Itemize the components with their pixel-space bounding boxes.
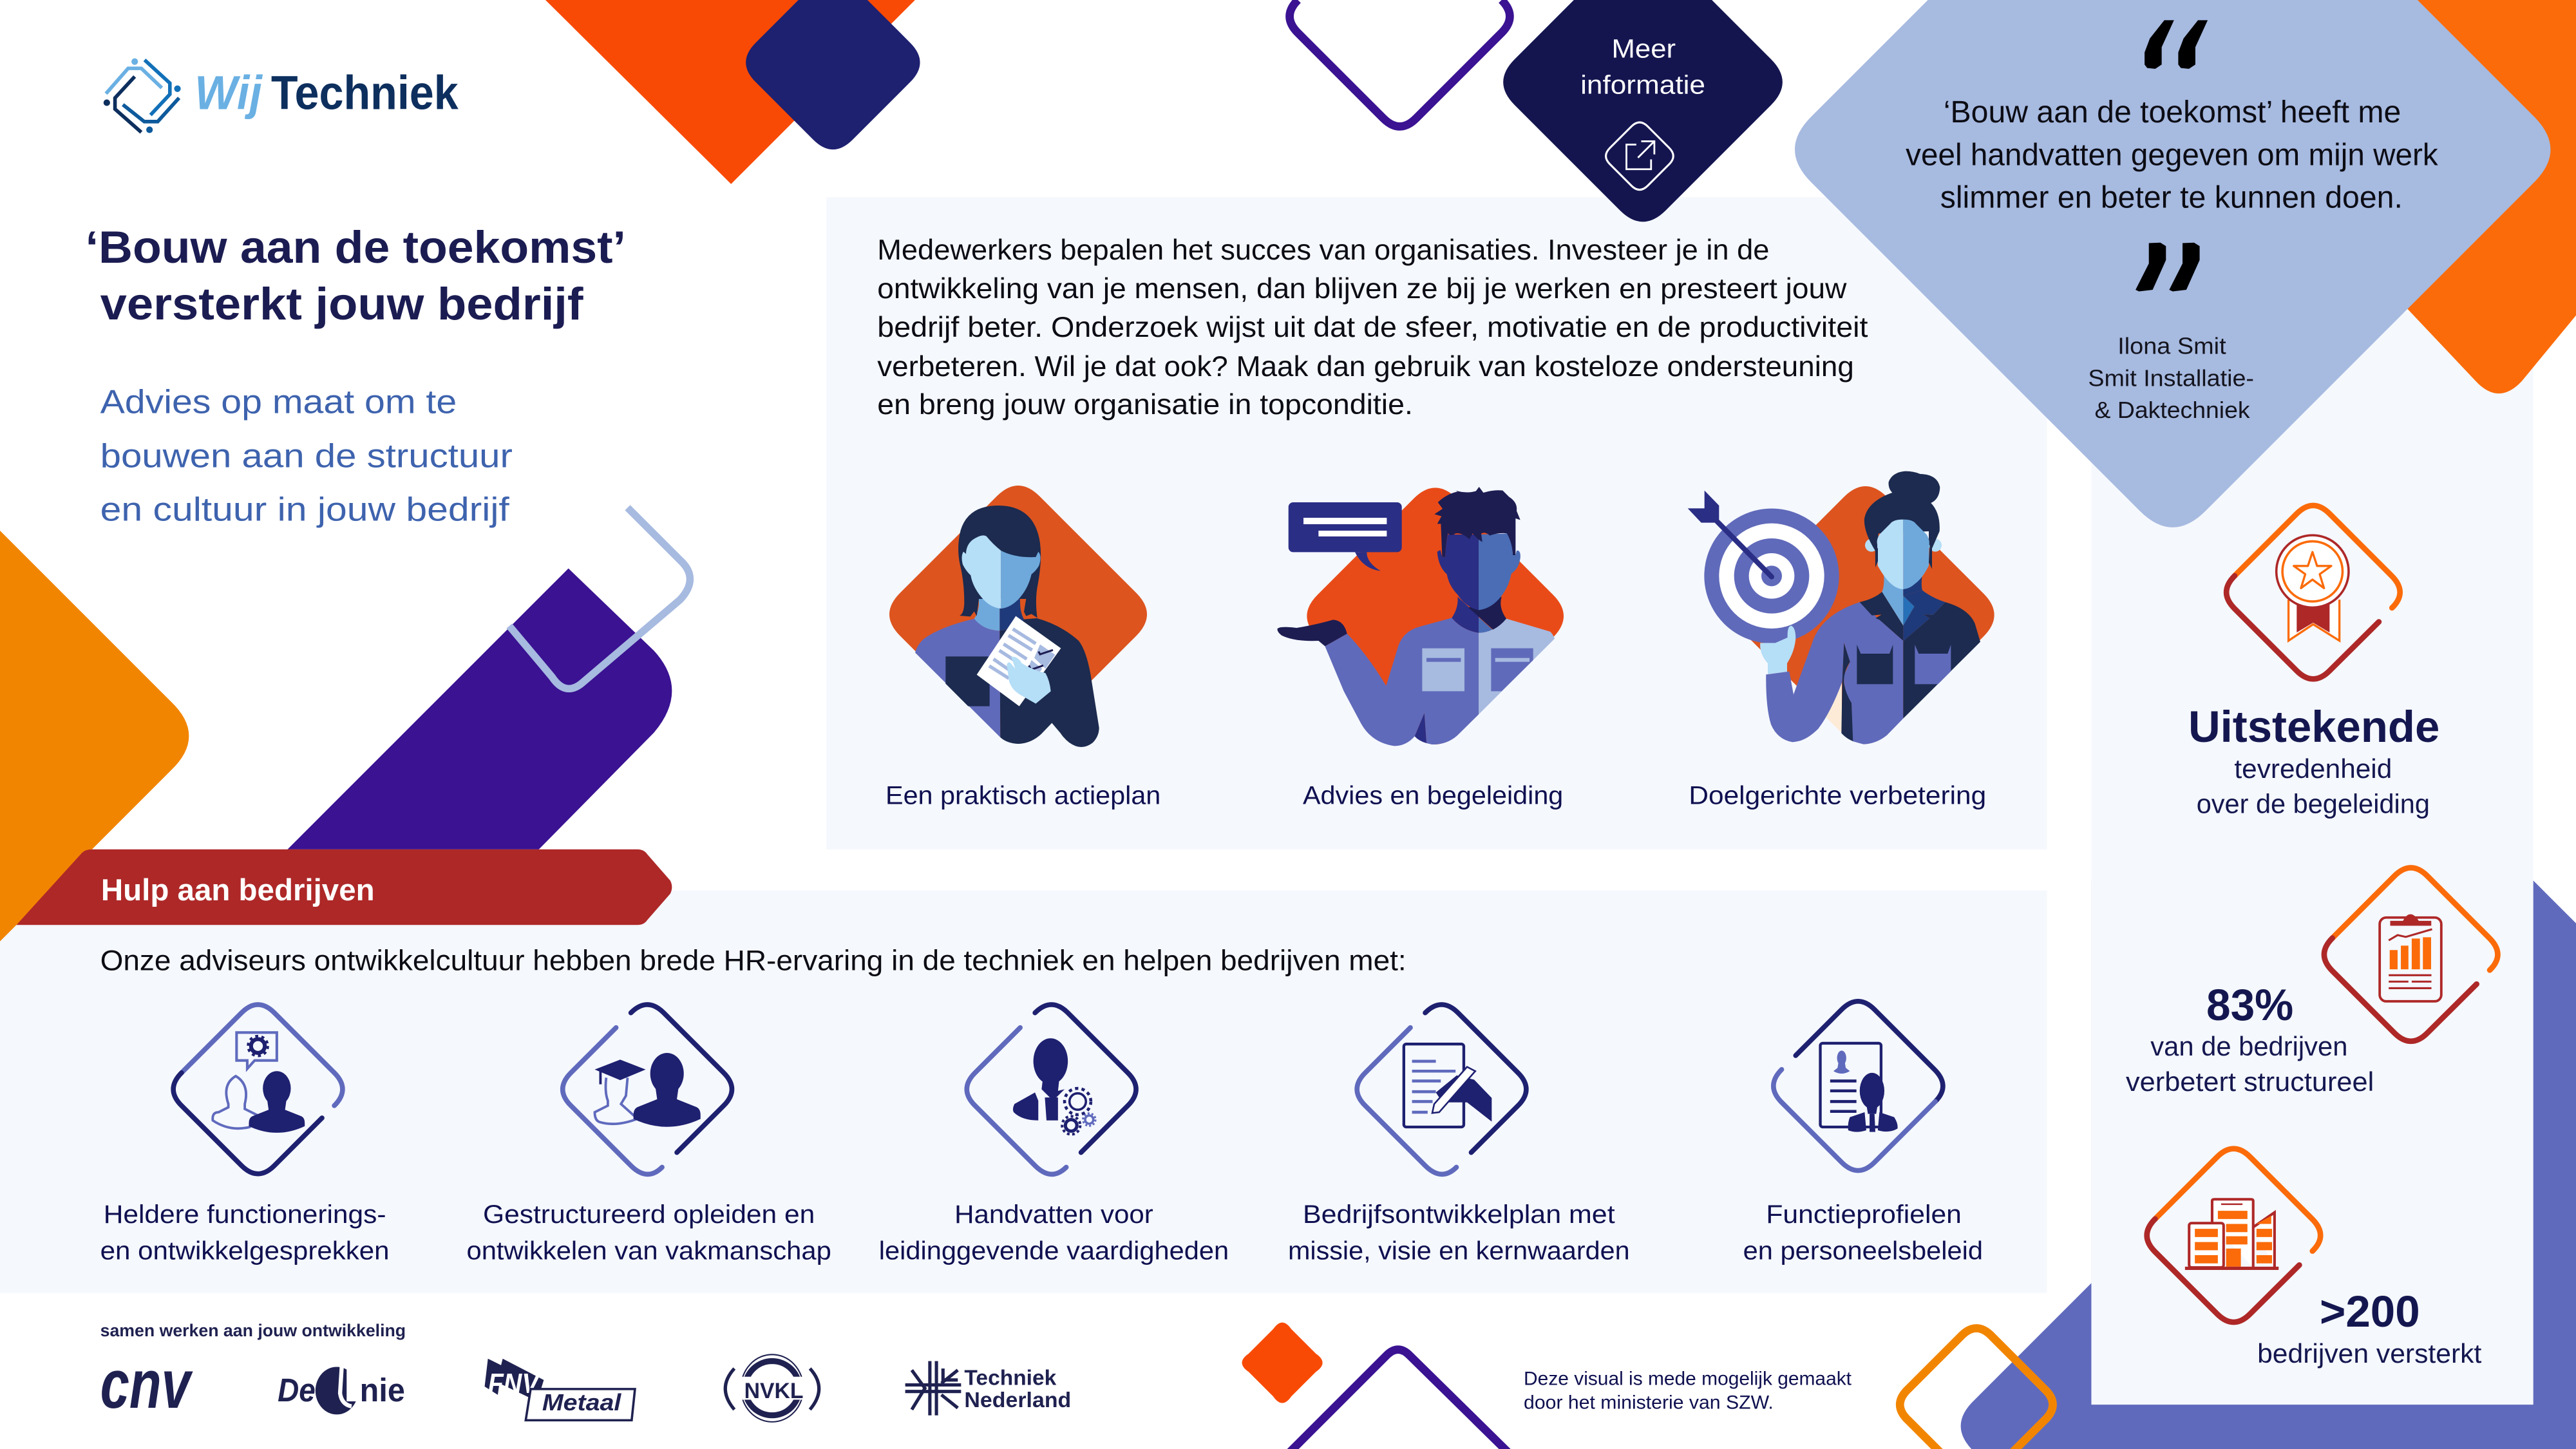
shape: small orange diamond [1242, 1323, 1323, 1403]
logo: Techniek Nederland: Nederland [964, 1388, 1071, 1412]
caption: talks: Heldere functionerings- [104, 1200, 386, 1229]
shape: right orange shape [2333, 0, 2576, 393]
text block: introduction: en breng jouw organisatie in topconditie. [877, 389, 1413, 421]
icon: business plan document [1357, 1005, 1526, 1174]
text block: ministry note [1524, 1368, 1852, 1413]
banner: help for companies [17, 849, 672, 925]
text block: ministry note: door het ministerie van SZW. [1524, 1392, 1774, 1413]
subtitle [100, 384, 513, 529]
statistic: 83 percent: verbetert structureel [2126, 1066, 2374, 1097]
quote text: ‘Bouw aan de toekomst’ heeft me [1944, 95, 2401, 129]
logo: De Unie: nie [360, 1372, 405, 1408]
caption: training: ontwikkelen van vakmanschap [466, 1236, 831, 1265]
panel: help for companies background [0, 891, 2047, 1293]
caption: talks [100, 1200, 390, 1265]
logo: FNV Metaal: FNV [488, 1368, 541, 1399]
statistic: 83 percent [2126, 980, 2374, 1097]
statistic: 83 percent: 83% [2206, 980, 2293, 1030]
icon: graduate and teacher [563, 1005, 732, 1174]
quote author: Ilona Smit [2117, 334, 2226, 359]
statistic: satisfaction: over de begeleiding [2197, 789, 2430, 819]
icon: manager with gears [967, 1005, 1136, 1174]
title: versterkt jouw bedrijf [100, 278, 583, 329]
logo: FNV Metaal [485, 1359, 635, 1420]
callout: more information diamond: Meer [1612, 33, 1676, 63]
caption: training: Gestructureerd opleiden en [483, 1200, 815, 1229]
subtitle: Advies op maat om te [100, 384, 457, 421]
statistic: more than 200 companies: bedrijven versterkt [2257, 1338, 2482, 1368]
logo: Techniek Nederland: Techniek [964, 1367, 1057, 1390]
statistic: satisfaction: tevredenheid [2234, 753, 2392, 784]
caption: job profiles: Functieprofielen [1766, 1200, 1962, 1229]
logo: Techniek Nederland [905, 1361, 1071, 1416]
caption: action plan: Een praktisch actieplan [886, 782, 1160, 810]
caption: training [466, 1200, 831, 1265]
subtitle: en cultuur in jouw bedrijf [100, 491, 509, 529]
shape: left orange shape [0, 531, 189, 942]
text block: introduction: verbeteren. Wil je dat ook? Maak dan gebruik van kosteloze ondersteuning [877, 351, 1854, 383]
caption: job profiles [1743, 1200, 1983, 1265]
icon: job profile document [1774, 1001, 1943, 1171]
icon: people with gear speech bubble [173, 1005, 343, 1174]
shape: light blue outline hook [509, 507, 690, 688]
statistic: more than 200 companies [2257, 1287, 2482, 1368]
text block: introduction: Medewerkers bepalen het succes van organisaties. Investeer je in de [877, 234, 1769, 266]
panel: statistics background [2091, 312, 2533, 1405]
logo: Wij Techniek [104, 59, 459, 133]
shape: navy rounded diamond [746, 0, 920, 149]
text: partners heading: samen werken aan jouw ontwikkeling [100, 1321, 406, 1340]
panel: introduction background [826, 197, 2047, 849]
callout: more information diamond [1503, 0, 1783, 222]
text block: ministry note: Deze visual is mede mogelijk gemaakt [1524, 1368, 1852, 1390]
icon: closing quote mark [2136, 243, 2200, 292]
shape: orange outline diamond [1900, 1328, 2053, 1449]
caption: plan: missie, visie en kernwaarden [1288, 1236, 1630, 1265]
illustration: man giving advice [1277, 487, 1564, 746]
illustration: woman with target [1688, 471, 1994, 744]
logo: FNV Metaal: Metaal [542, 1390, 621, 1416]
text block: introduction: bedrijf beter. Onderzoek wijst uit dat de sfeer, motivatie en de productiviteit [877, 312, 1868, 343]
shape: top purple outline diamond [1290, 0, 1510, 126]
shape: bottom purple outline diamond [1286, 1350, 1511, 1449]
quote author [2088, 334, 2254, 423]
caption: plan [1288, 1200, 1630, 1265]
callout: more information diamond: informatie [1580, 70, 1705, 99]
quote author: Smit Installatie- [2088, 365, 2254, 391]
text block: introduction: ontwikkeling van je mensen, dan blijven ze bij je werken en presteert jouw [877, 273, 1847, 305]
caption: job profiles: en personeelsbeleid [1743, 1236, 1983, 1265]
logo: De Unie: De [278, 1372, 316, 1408]
quote text: veel handvatten gegeven om mijn werk [1906, 137, 2438, 172]
statistic: satisfaction: Uitstekende [2188, 702, 2439, 752]
text block: lead sentence: Onze adviseurs ontwikkelcultuur hebben brede HR-ervaring in de techniek en helpen bedrijven met: [100, 945, 1406, 976]
caption: leadership [879, 1200, 1229, 1265]
title [86, 222, 626, 329]
statistic: more than 200 companies: >200 [2320, 1287, 2420, 1336]
caption: advice: Advies en begeleiding [1303, 782, 1563, 810]
caption: target: Doelgerichte verbetering [1689, 782, 1986, 810]
caption: leadership: leidinggevende vaardigheden [879, 1236, 1229, 1265]
subtitle: bouwen aan de structuur [100, 438, 513, 475]
quote author: & Daktechniek [2095, 397, 2250, 423]
shape: top orange triangle [545, 0, 915, 184]
text block: introduction [877, 234, 1868, 421]
logo: NVKL [725, 1354, 819, 1422]
quote text: slimmer en beter te kunnen doen. [1940, 180, 2403, 215]
statistic: buildings icon [2147, 1149, 2320, 1322]
banner: help for companies: Hulp aan bedrijven [101, 873, 375, 907]
shape: purple diagonal band [287, 569, 672, 849]
caption: plan: Bedrijfsontwikkelplan met [1303, 1200, 1615, 1229]
caption: leadership: Handvatten voor [954, 1200, 1153, 1229]
shape: indigo corner background [1961, 880, 2576, 1449]
logo: Wij Techniek: Wij [194, 66, 263, 120]
logo: De Unie [278, 1365, 405, 1414]
title: ‘Bouw aan de toekomst’ [86, 222, 626, 272]
illustration: woman with action plan [889, 486, 1147, 747]
logo: Wij Techniek: Techniek [271, 66, 459, 120]
icon: opening quote mark [2145, 20, 2208, 69]
statistic: chart clipboard icon [2324, 867, 2497, 1041]
caption: talks: en ontwikkelgesprekken [100, 1236, 390, 1265]
statistic: award icon [2226, 506, 2400, 679]
statistic: 83 percent: van de bedrijven [2150, 1031, 2347, 1061]
callout: quote diamond [1795, 0, 2550, 527]
quote text [1906, 95, 2438, 215]
logo: CNV: cnv [100, 1345, 193, 1423]
statistic: satisfaction [2188, 702, 2439, 819]
logo: NVKL: NVKL [744, 1379, 803, 1403]
